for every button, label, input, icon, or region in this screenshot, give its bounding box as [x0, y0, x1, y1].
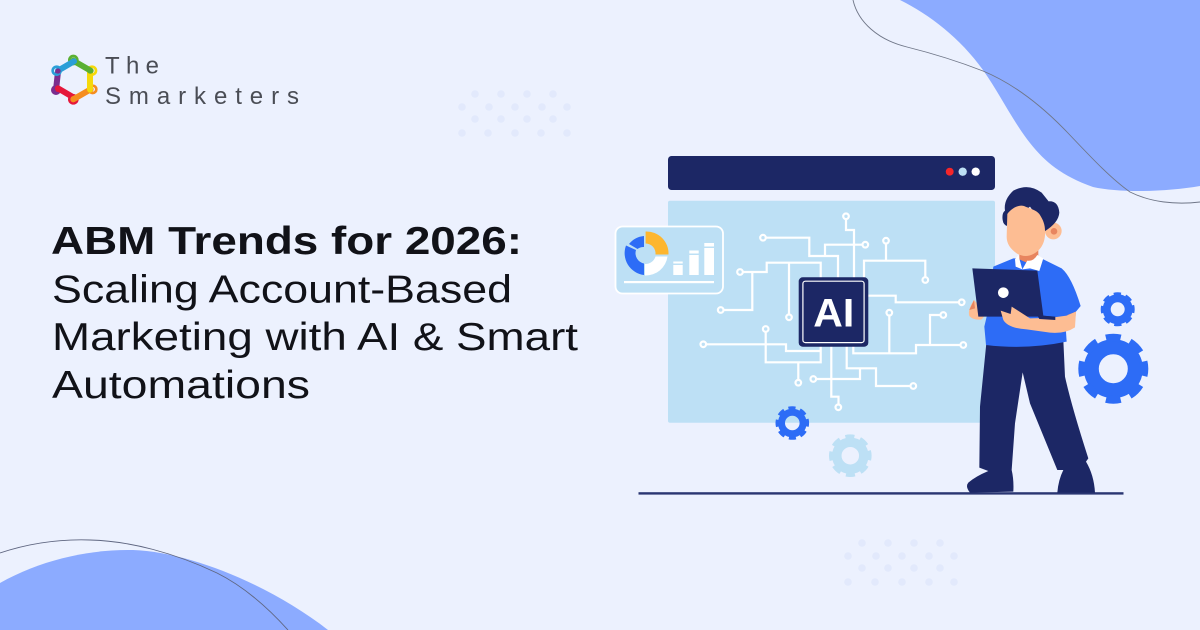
- dot pattern: bottom: [844, 539, 958, 586]
- window dots: [946, 167, 980, 176]
- laptop base lip: [1037, 315, 1055, 320]
- donut chart: [625, 231, 669, 276]
- neck: [1019, 250, 1038, 263]
- icon: gear right large: [1082, 338, 1144, 400]
- ear: [1045, 223, 1062, 239]
- sleeve shade: [1067, 312, 1076, 322]
- icon: pale gear: [832, 437, 869, 475]
- curve line: top right: [853, 0, 1200, 203]
- shirt: [984, 258, 1081, 347]
- browser title bar: [668, 156, 995, 190]
- laptop logo: [998, 287, 1009, 298]
- title line 1: ABM Trends for 2026:: [51, 220, 522, 263]
- logo wordmark line 1: The: [105, 52, 159, 80]
- circuit nodes: [700, 214, 966, 410]
- browser panel with AI circuit: [668, 201, 995, 423]
- hair: [1002, 187, 1059, 231]
- bar chart: [673, 243, 714, 275]
- forearm and hand: [1001, 307, 1076, 333]
- chart baseline: [624, 281, 714, 283]
- ground line: [638, 492, 1124, 495]
- logo icon: coloured ring of links: [52, 56, 96, 103]
- chart card: [616, 226, 723, 294]
- title line 3: Marketing with AI & Smart: [52, 316, 578, 359]
- dot pattern: top: [458, 90, 571, 137]
- circuit traces: [706, 219, 960, 404]
- left hand: [969, 300, 987, 320]
- blob: top right: [900, 0, 1200, 191]
- logo: The Smarketers: [52, 52, 299, 110]
- laptop: [972, 268, 1053, 317]
- collar: [1015, 255, 1043, 271]
- title: [51, 220, 578, 407]
- face: [1007, 206, 1045, 256]
- logo wordmark line 2: Smarketers: [105, 83, 299, 110]
- person with laptop: [967, 187, 1095, 493]
- AI chip: AI: [813, 292, 854, 336]
- AI chip: [799, 277, 868, 347]
- icon: gear right upper: [1103, 294, 1133, 324]
- curve line: bottom left: [0, 540, 288, 630]
- title line 4: Automations: [52, 364, 310, 407]
- title line 2: Scaling Account-Based: [52, 268, 512, 311]
- trousers and shoes: [967, 340, 1095, 493]
- icon: small blue gear: [778, 408, 807, 438]
- blob: bottom left: [0, 550, 328, 630]
